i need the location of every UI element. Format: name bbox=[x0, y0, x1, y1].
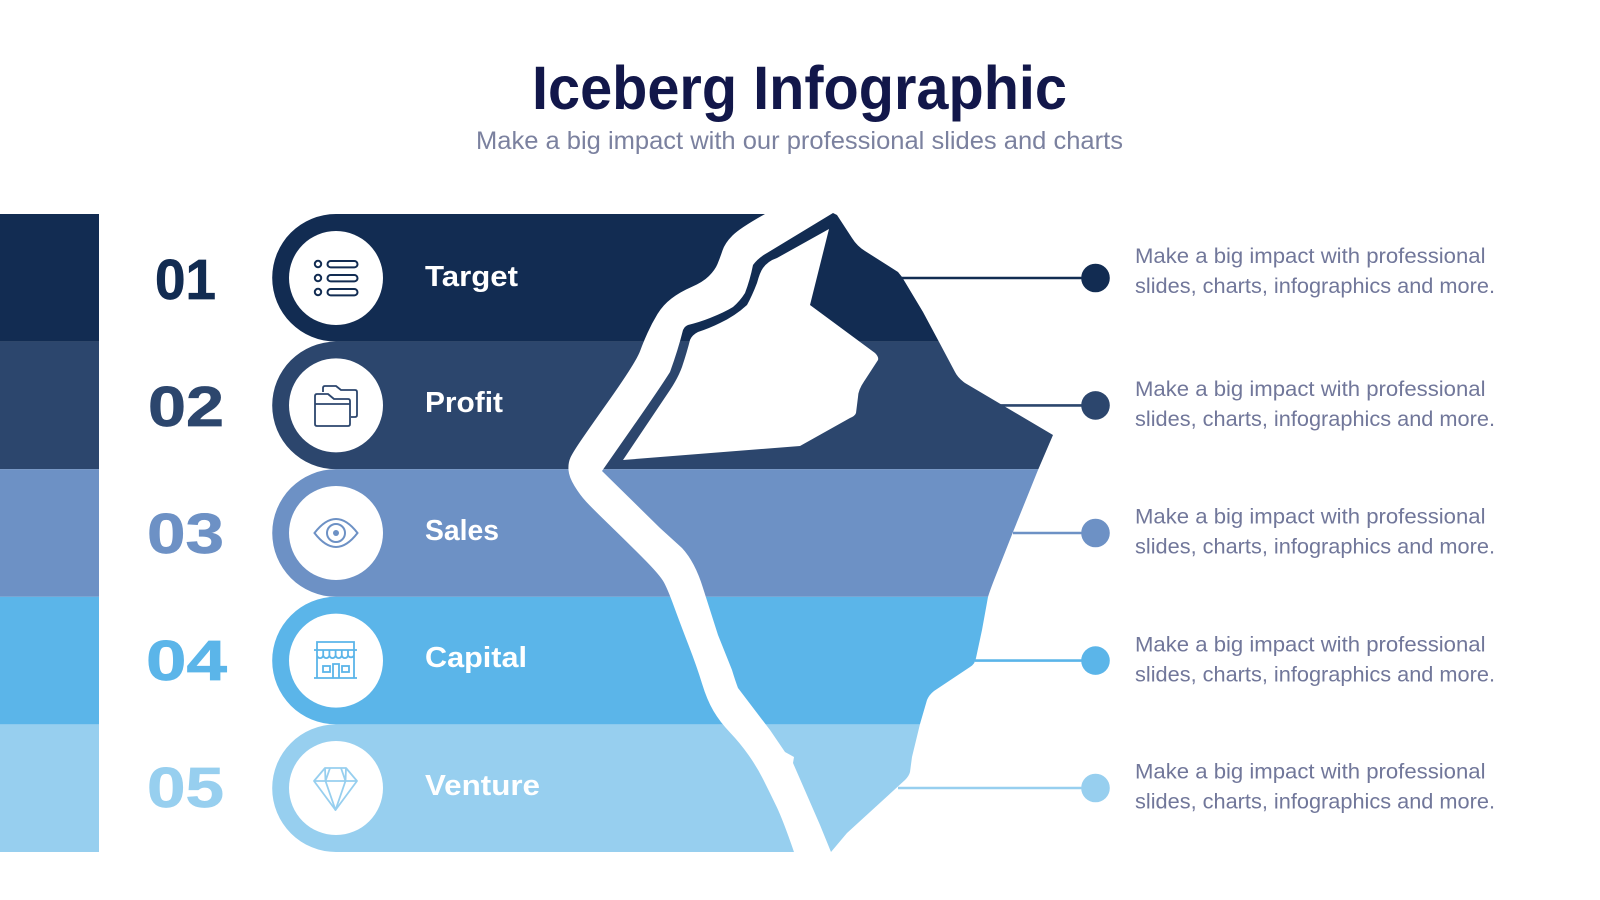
description: target: slides, charts, infographics and more. bbox=[1135, 274, 1495, 298]
description: capital: Make a big impact with professional bbox=[1135, 632, 1486, 656]
title: Iceberg Infographic bbox=[532, 54, 1067, 122]
step numbers bbox=[146, 248, 227, 820]
description: sales: slides, charts, infographics and more. bbox=[1135, 534, 1495, 558]
description: sales bbox=[1135, 504, 1495, 558]
left colour stripes bbox=[0, 214, 99, 852]
step numbers: 02 bbox=[148, 375, 224, 439]
connector dots bbox=[1081, 264, 1110, 802]
subtitle: Make a big impact with our professional slides and charts bbox=[476, 127, 1123, 155]
iceberg white tip bbox=[623, 229, 878, 460]
description: capital bbox=[1135, 632, 1495, 686]
band labels: Venture bbox=[425, 770, 540, 802]
icon: folders bbox=[315, 386, 357, 426]
iceberg bands bbox=[260, 200, 1080, 852]
band labels bbox=[425, 261, 540, 802]
band labels: Capital bbox=[425, 642, 527, 674]
description: venture bbox=[1135, 760, 1495, 814]
step numbers: 04 bbox=[146, 629, 227, 693]
connector lines bbox=[898, 278, 1095, 788]
band labels: Target bbox=[425, 261, 518, 293]
icon: storefront bbox=[314, 642, 357, 678]
step numbers: 05 bbox=[147, 756, 224, 820]
description: profit: Make a big impact with professional bbox=[1135, 377, 1486, 401]
description: target: Make a big impact with professional bbox=[1135, 244, 1486, 268]
step numbers: 01 bbox=[155, 248, 216, 312]
band labels: Profit bbox=[425, 387, 503, 419]
icon: eye bbox=[314, 519, 358, 547]
step numbers: 03 bbox=[147, 502, 224, 566]
description: sales: Make a big impact with professional bbox=[1135, 504, 1486, 528]
icon circles bbox=[289, 231, 383, 835]
description: venture: slides, charts, infographics and more. bbox=[1135, 790, 1495, 814]
description: venture: Make a big impact with professional bbox=[1135, 760, 1486, 784]
description: profit: slides, charts, infographics and more. bbox=[1135, 407, 1495, 431]
description: profit bbox=[1135, 377, 1495, 431]
description: capital: slides, charts, infographics and more. bbox=[1135, 662, 1495, 686]
band labels: Sales bbox=[425, 515, 499, 547]
icon: list bbox=[315, 261, 358, 295]
icon: diamond bbox=[314, 768, 357, 810]
description: target bbox=[1135, 244, 1495, 298]
